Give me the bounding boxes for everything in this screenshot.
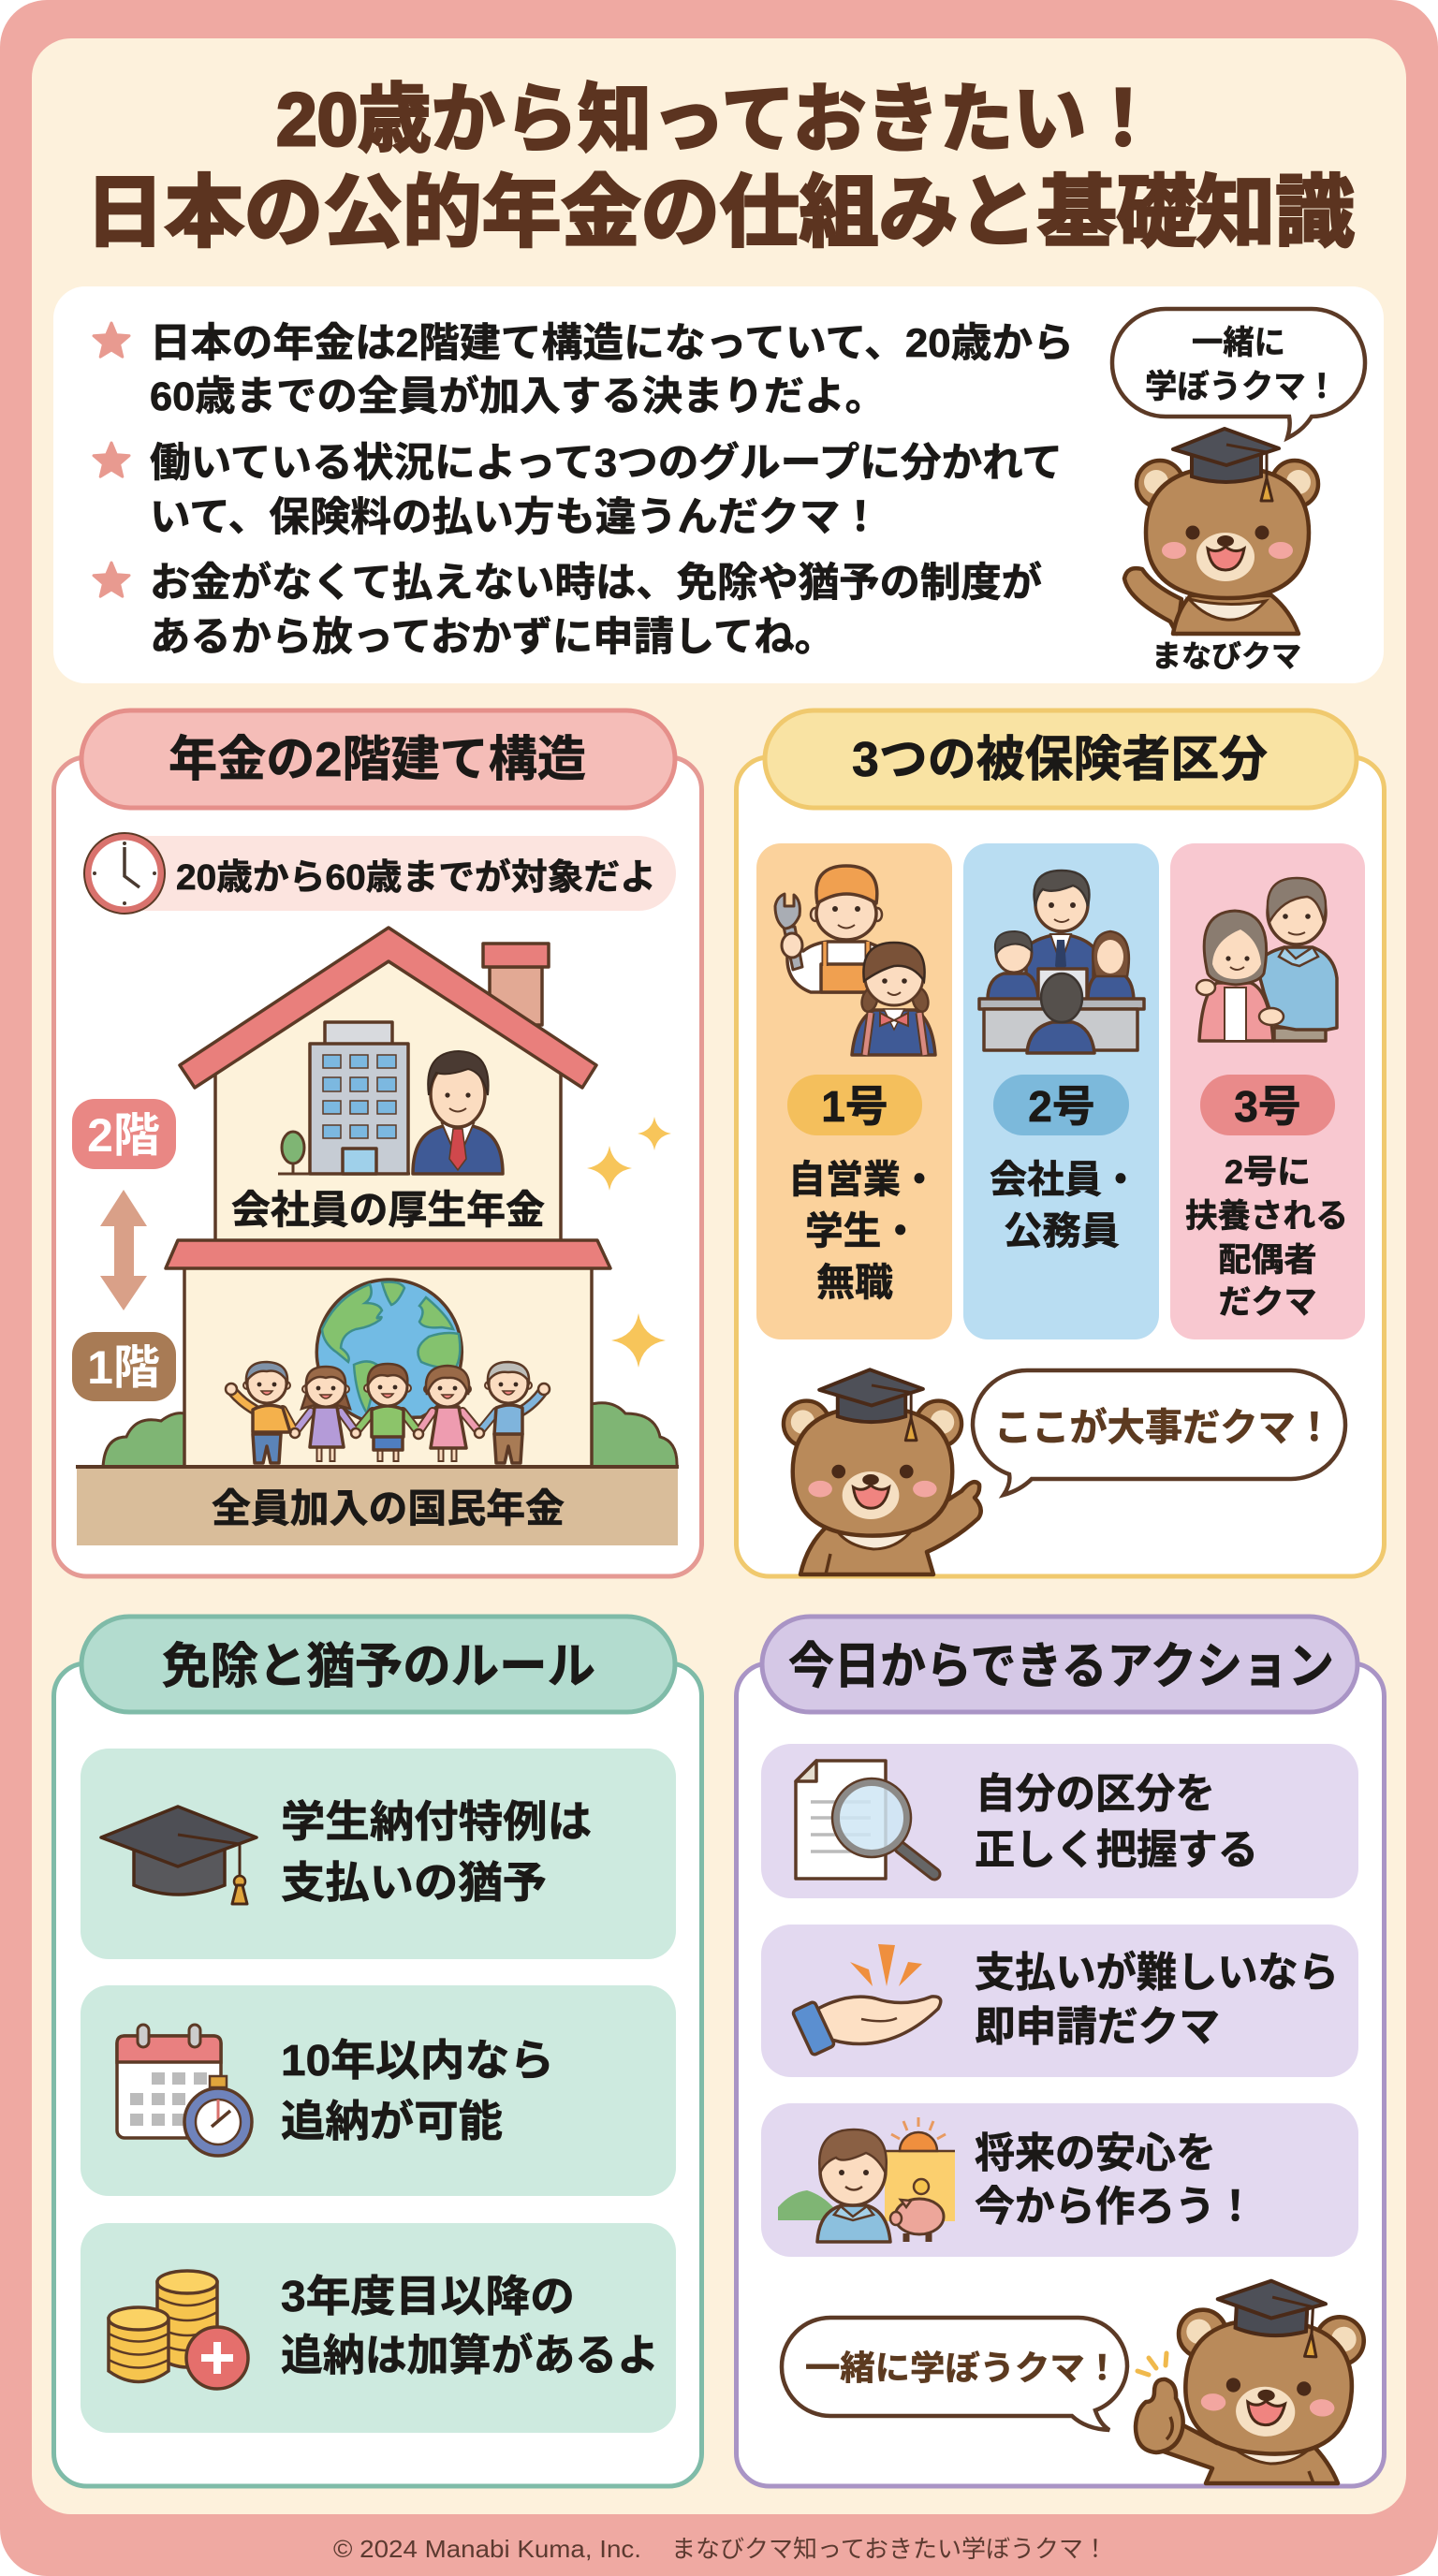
footer: [333, 2535, 1108, 2563]
icon: open hand: [792, 1944, 941, 2056]
house: upper floor: [180, 928, 596, 1241]
speech bubble: ここが大事だクマ: ここが大事だクマ！: [994, 1406, 1333, 1449]
action 1: 自分の区分を: [976, 1771, 1215, 1817]
icon: graduation cap: [101, 1807, 257, 1904]
icon: clock: [84, 833, 165, 914]
house: upper floor: 会社員の厚生年金: [231, 1188, 545, 1232]
icon: company meeting: [979, 871, 1144, 1053]
bullet 2: いて、保険料の払い方も違うんだクマ！: [150, 495, 881, 540]
panel: insured categories: [736, 710, 1384, 1576]
rule 1: [81, 1749, 676, 1959]
age note: [84, 833, 676, 914]
panel: actions: [736, 1617, 1384, 2486]
bullet 3: お金がなくて払えない時は、免除や猶予の制度が: [150, 561, 1042, 606]
floor badge: 2階: 2階: [87, 1109, 160, 1162]
heading: [762, 1617, 1357, 1712]
icon: globe: [316, 1280, 462, 1419]
heading: 今日からできるアクション: [788, 1639, 1334, 1694]
icon: coins and plus: [109, 2271, 248, 2389]
title: 日本の公的年金の仕組みと基礎知識: [85, 168, 1355, 256]
rule 2: 10年以内なら: [281, 2036, 554, 2085]
house: ground floor: [166, 1240, 610, 1467]
badge: 2号: [993, 1075, 1129, 1135]
category 3 description: 配偶者: [1219, 1242, 1316, 1279]
bullet 3: [94, 561, 1042, 660]
action 2: [761, 1925, 1358, 2077]
heading: 3つの被保険者区分: [852, 733, 1268, 787]
icon: company employee: [413, 1051, 503, 1174]
bullet 3: あるから放っておかずに申請してね。: [150, 615, 835, 660]
heading: [765, 710, 1357, 808]
card: category 2: [963, 843, 1159, 1339]
action 2: 即申請だクマ: [975, 2004, 1220, 2050]
floor badge: 1階: 1階: [87, 1341, 160, 1394]
ground: national pension: [76, 1467, 679, 1545]
category 3 description: 2号に: [1225, 1154, 1311, 1191]
badge: 3号: 3号: [1234, 1082, 1301, 1131]
heading: [81, 1617, 675, 1712]
icon: document and magnifier: [796, 1761, 934, 1879]
panel: exemption and deferral rules: [54, 1617, 702, 2486]
person 4: [424, 1366, 471, 1462]
icon: elderly couple: [1196, 878, 1337, 1041]
rule 1: 学生納付特例は: [281, 1797, 592, 1846]
card: category 3: [1170, 843, 1365, 1339]
floor badge: 2階: [72, 1099, 176, 1169]
person 3: [364, 1364, 411, 1462]
speech bubble: 一緒に学ぼうクマ: 学ぼうクマ！: [1145, 369, 1338, 405]
heading: 年金の2階建て構造: [169, 733, 586, 787]
rule 3: 3年度目以降の: [281, 2272, 575, 2320]
people holding hands: [226, 1362, 550, 1463]
rule 3: [81, 2223, 676, 2433]
bullet 1: 60歳までの全員が加入する決まりだよ。: [150, 374, 886, 419]
ground: national pension: 全員加入の国民年金: [212, 1486, 565, 1530]
person 1: [243, 1362, 290, 1463]
bullet 1: [94, 321, 1074, 419]
category 3 description: 扶養される: [1185, 1198, 1348, 1235]
mascot bear thumbs up: [1136, 2276, 1367, 2483]
heading: [81, 710, 675, 808]
badge: 1号: [787, 1075, 922, 1135]
speech bubble: 一緒に学ぼうクマ: [1112, 309, 1365, 438]
heading: 免除と猶予のルール: [162, 1640, 595, 1694]
speech bubble: 一緒に学ぼうクマ: 一緒に: [1192, 325, 1285, 361]
bushes: [103, 1403, 677, 1467]
bullet 2: [94, 441, 1063, 540]
action 1: 正しく把握する: [975, 1827, 1258, 1873]
icon: worker and student: [775, 866, 935, 1055]
bullet 1: 日本の年金は2階建て構造になっていて、20歳から: [150, 321, 1074, 366]
mascot name: まなびクマ: [1152, 639, 1301, 673]
action 3: [761, 2103, 1358, 2257]
category 2 description: [990, 1158, 1139, 1252]
badge: 3号: [1200, 1075, 1335, 1135]
category 1 description: [788, 1158, 938, 1304]
title: [85, 78, 1355, 256]
action 2: 支払いが難しいなら: [975, 1950, 1339, 1996]
rule 1: 支払いの猶予: [281, 1858, 547, 1907]
category 1 description: 自営業・: [788, 1158, 938, 1201]
category 1 description: 無職: [816, 1261, 893, 1304]
badge: 1号: 1号: [821, 1082, 888, 1131]
category 2 description: 会社員・: [990, 1158, 1139, 1201]
category 1 description: 学生・: [805, 1209, 919, 1252]
action 3: 将来の安心を: [975, 2130, 1216, 2176]
icon: office building: [278, 1022, 410, 1174]
category 2 description: 公務員: [1004, 1209, 1120, 1252]
footer: まなびクマ知っておきたい学ぼうクマ！: [671, 2535, 1108, 2563]
house: chimney: [483, 944, 549, 1025]
icon: future savings: [778, 2117, 955, 2242]
category 3 description: だクマ: [1219, 1284, 1316, 1321]
title: 20歳から知っておきたい！: [276, 78, 1160, 161]
arrow: between floors: [100, 1190, 147, 1310]
bullet 2: 働いている状況によって3つのグループに分かれて: [150, 441, 1063, 486]
person 2: [301, 1367, 350, 1462]
action 1: [761, 1744, 1358, 1898]
rule 2: [81, 1985, 676, 2196]
icon: calendar and stopwatch: [117, 2025, 252, 2156]
speech bubble: ここが大事だクマ: [973, 1370, 1345, 1495]
category 3 description: [1185, 1154, 1348, 1321]
mascot bear pointing: [784, 1369, 981, 1574]
action 3: 今から作ろう！: [975, 2184, 1255, 2230]
person 5: [485, 1362, 532, 1463]
floor badge: 1階: [72, 1332, 176, 1401]
speech bubble: 一緒に学ぼうクマ: [782, 2318, 1127, 2430]
mascot bear waving: [1124, 429, 1318, 634]
speech bubble: 一緒に学ぼうクマ: 一緒に学ぼうクマ！: [805, 2349, 1120, 2387]
rule 2: 追納が可能: [281, 2097, 503, 2145]
panel: summary: [53, 286, 1384, 683]
panel: two-storey structure: [54, 710, 702, 1576]
card: category 1: [756, 843, 952, 1339]
footer: © 2024 Manabi Kuma, Inc.: [333, 2535, 641, 2563]
badge: 2号: 2号: [1028, 1082, 1095, 1131]
sparkles: [587, 1117, 671, 1368]
age note: 20歳から60歳までが対象だよ: [176, 858, 656, 898]
rule 3: 追納は加算があるよ: [281, 2331, 659, 2379]
